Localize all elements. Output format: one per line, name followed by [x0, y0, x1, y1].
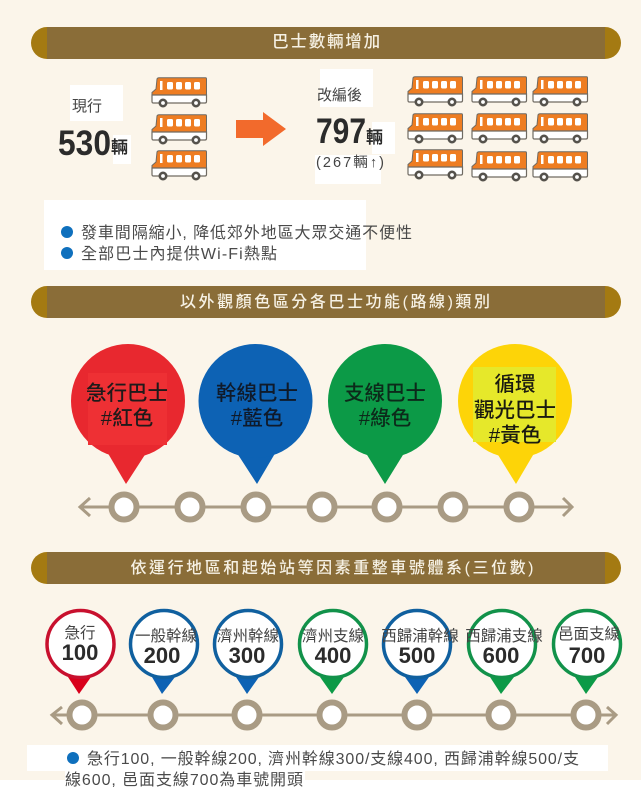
heading: bus count increase: [31, 27, 621, 59]
pin: trunk blue: #藍色: [231, 407, 283, 430]
pin: trunk blue: 幹線巴士: [216, 381, 298, 405]
text block: service benefits: 發車間隔縮小, 降低郊外地區大眾交通不便性: [81, 224, 412, 242]
panel: current bus count: [58, 85, 131, 164]
text block: route number prefixes: 急行100, 一般幹線200, 濟州幹線300/支線400, 西歸浦幹線500/支: [87, 749, 579, 768]
pin: 500 Seogwipo trunk: 西歸浦幹線: [381, 626, 459, 645]
pin: circular sightseeing yellow: 循環: [494, 373, 536, 396]
pin: 400 Jeju branch: 濟州支線: [302, 627, 364, 645]
pin: 200 general trunk: 一般幹線: [135, 626, 197, 645]
panel: revised bus count: [315, 69, 395, 184]
pin: express red: [71, 344, 185, 484]
pin: 600 Seogwipo branch: [465, 610, 543, 694]
pin: 400 Jeju branch: 400: [315, 643, 351, 668]
panel: current bus count: 530: [58, 124, 111, 163]
pin: branch green: #綠色: [359, 407, 411, 430]
pin: 100 express: [47, 610, 114, 694]
pin: 500 Seogwipo trunk: 500: [399, 643, 435, 668]
timeline: route numbers: [52, 702, 616, 728]
heading: route number system: [31, 552, 621, 584]
pin: 400 Jeju branch: [300, 610, 366, 694]
icons: current buses: [152, 78, 206, 179]
pin: trunk blue: [198, 344, 312, 484]
heading: bus count increase: 巴士數輛增加: [272, 32, 382, 51]
heading: bus categories by colour: [31, 286, 621, 318]
pin: 200 general trunk: [130, 610, 198, 694]
pin: 700 Eumnyeon branch: 700: [569, 643, 605, 668]
pin: circular sightseeing yellow: [458, 344, 572, 484]
panel: revised bus count: (267輛↑): [316, 154, 384, 171]
heading: bus categories by colour: 以外觀顏色區分各巴士功能(路線)類別: [180, 293, 490, 311]
pin: circular sightseeing yellow: #黃色: [489, 424, 541, 447]
pin: 500 Seogwipo trunk: [381, 610, 459, 694]
pin: 700 Eumnyeon branch: 邑面支線: [558, 625, 620, 643]
pin: circular sightseeing yellow: 觀光巴士: [474, 399, 556, 422]
panel: current bus count: 現行: [72, 98, 102, 115]
pin: 300 Jeju trunk: 300: [229, 643, 265, 668]
pin: 100 express: 100: [62, 640, 98, 665]
pin: branch green: [328, 344, 442, 484]
text block: route number prefixes: [27, 745, 608, 789]
arrow: current to revised: [236, 112, 286, 146]
pin: 600 Seogwipo branch: 西歸浦支線: [465, 627, 543, 645]
pin: 200 general trunk: 200: [144, 643, 180, 668]
text block: route number prefixes: 線600, 邑面支線700為車號開頭: [65, 771, 303, 789]
pin: 300 Jeju trunk: 濟州幹線: [217, 626, 279, 645]
pin: 300 Jeju trunk: [214, 610, 282, 694]
text block: service benefits: [44, 200, 412, 270]
panel: revised bus count: 改編後: [317, 87, 362, 104]
icons: revised buses: [408, 77, 588, 180]
panel: current bus count: 輛: [111, 138, 128, 157]
pin: express red: 急行巴士: [86, 382, 168, 405]
heading: route number system: 依運行地區和起始站等因素重整車號體系(三位數): [130, 558, 534, 577]
pin: 100 express: 急行: [64, 624, 96, 642]
pin: branch green: 支線巴士: [344, 382, 426, 405]
panel: revised bus count: 輛: [366, 128, 383, 147]
text block: service benefits: 全部巴士內提供Wi-Fi熱點: [81, 245, 277, 263]
panel: revised bus count: 797: [316, 112, 366, 151]
timeline: bus categories: [80, 494, 572, 520]
pin: 700 Eumnyeon branch: [554, 610, 620, 694]
pin: express red: #紅色: [101, 407, 153, 430]
pin: 600 Seogwipo branch: 600: [483, 643, 519, 668]
